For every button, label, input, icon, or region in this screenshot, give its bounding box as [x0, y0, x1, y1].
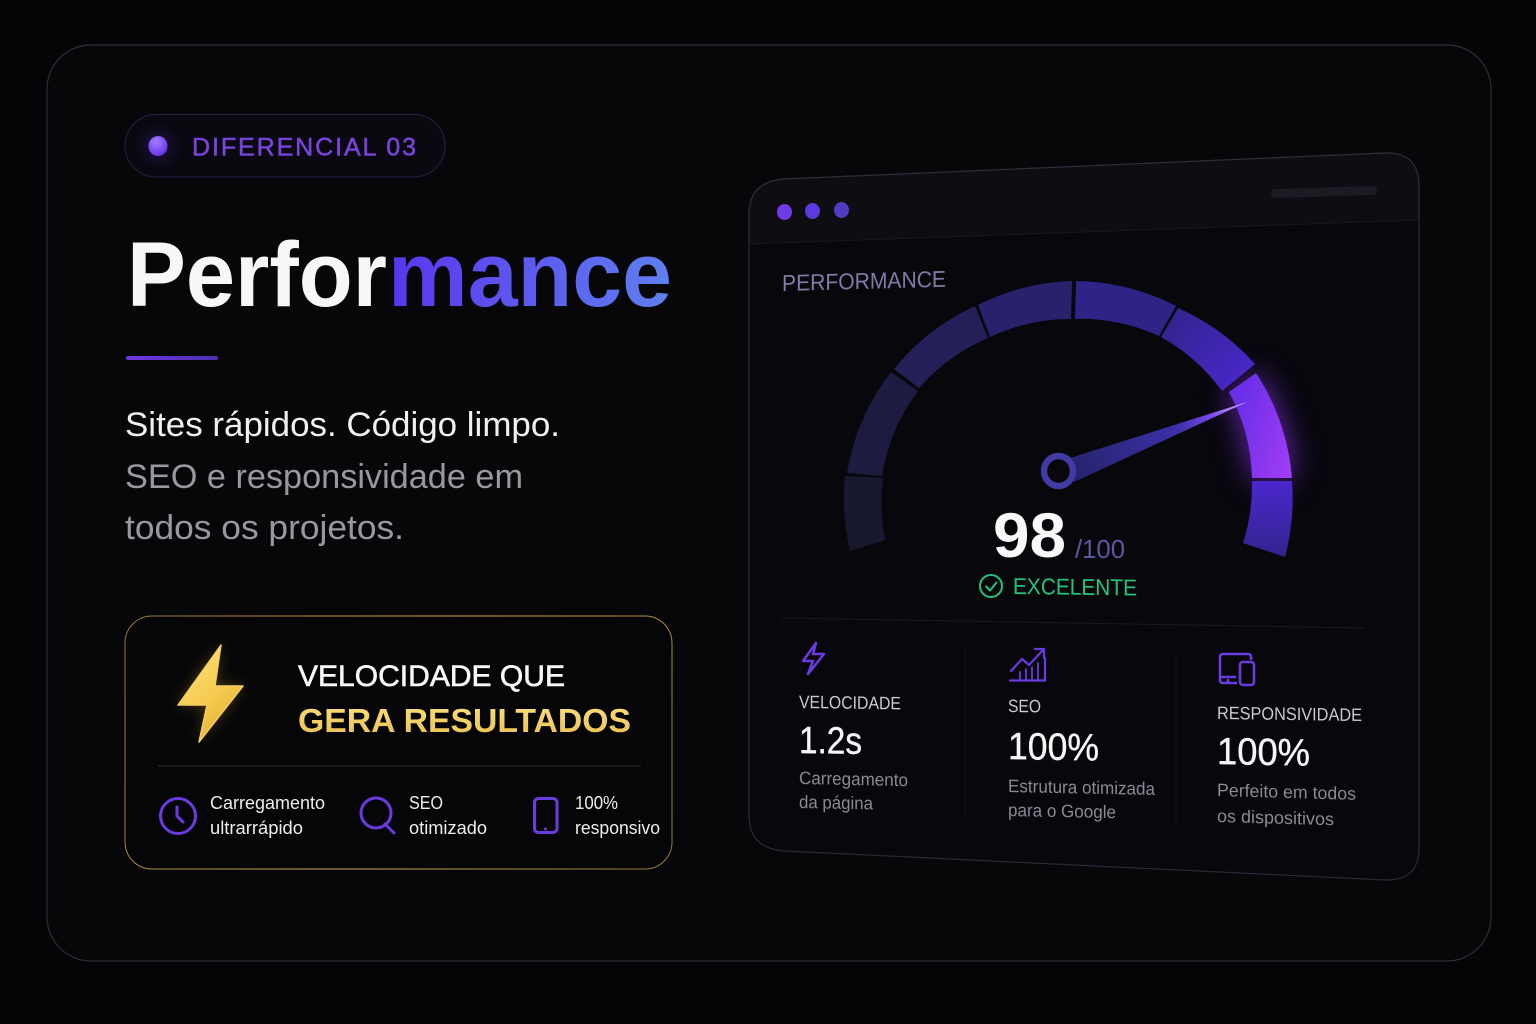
stat description: para o Google [1008, 800, 1116, 822]
feature: carregamento ultrarrápido: Carregamento [210, 793, 325, 813]
feature: 100% responsivo: responsivo [575, 818, 660, 838]
feature: 100% responsivo [575, 793, 660, 838]
feature: carregamento ultrarrápido [210, 793, 325, 838]
icon: search [361, 798, 394, 833]
stat description: Estrutura otimizada [1008, 776, 1156, 799]
address bar [1271, 186, 1377, 198]
stat value: 100% [1217, 731, 1310, 775]
feature: seo otimizado: otimizado [409, 818, 487, 838]
icon: growth chart [1010, 649, 1045, 680]
gauge glow [1229, 373, 1292, 478]
score: 98/100: 98 [993, 501, 1066, 571]
stat description: Carregamento [799, 768, 908, 790]
gauge segments [844, 281, 1293, 557]
stat value: 1.2s [799, 720, 862, 763]
stat: velocidade [799, 643, 908, 813]
stat description: da página [799, 792, 874, 813]
icon: gold lightning bolt [178, 645, 243, 742]
badge: diferencial 03: DIFERENCIAL 03 [192, 134, 416, 162]
stat description: os dispositivos [1217, 806, 1334, 829]
description text: Sites rápidos. Código limpo. [125, 406, 560, 444]
label: performance: PERFORMANCE [782, 266, 946, 296]
stat: responsividade [1217, 654, 1362, 829]
stat: seo [1008, 649, 1156, 822]
icon: clock [160, 798, 196, 834]
status: excelente: EXCELENTE [1013, 573, 1137, 600]
panel: browser window dashboard [749, 153, 1419, 880]
stat label: VELOCIDADE [799, 692, 901, 713]
description text: SEO e responsividade em [125, 458, 523, 496]
stat label: SEO [1008, 696, 1041, 716]
score: 98/100: /100 [1075, 534, 1125, 564]
score: 98/100 [993, 501, 1125, 571]
window dots [777, 202, 849, 220]
feature: seo otimizado: SEO [409, 793, 443, 813]
stat description [799, 768, 908, 813]
feature: seo otimizado [409, 793, 487, 838]
badge: diferencial 03 [125, 114, 445, 177]
icon: smartphone [534, 798, 557, 832]
icon: lightning outline [803, 643, 824, 674]
panel: velocidade que gera resultados [125, 616, 672, 869]
stat description [1217, 780, 1356, 829]
title underline [126, 356, 218, 360]
description text: todos os projetos. [125, 509, 404, 547]
icon: devices [1220, 654, 1254, 685]
stat description [1008, 776, 1156, 822]
heading: gera resultados: GERA RESULTADOS [298, 702, 631, 739]
feature: 100% responsivo: 100% [575, 793, 618, 813]
stat label: RESPONSIVIDADE [1217, 703, 1362, 725]
chart: speed gauge [844, 281, 1293, 557]
stat description: Perfeito em todos [1217, 780, 1356, 804]
stat value: 100% [1008, 726, 1099, 769]
heading: velocidade que: VELOCIDADE QUE [298, 660, 565, 693]
browser title bar [749, 153, 1419, 244]
gauge needle [1044, 402, 1247, 486]
title: Performance: Perfor [127, 224, 387, 326]
feature: carregamento ultrarrápido: ultrarrápido [210, 818, 303, 838]
title: Performance: mance [388, 224, 672, 326]
description text [125, 406, 560, 547]
